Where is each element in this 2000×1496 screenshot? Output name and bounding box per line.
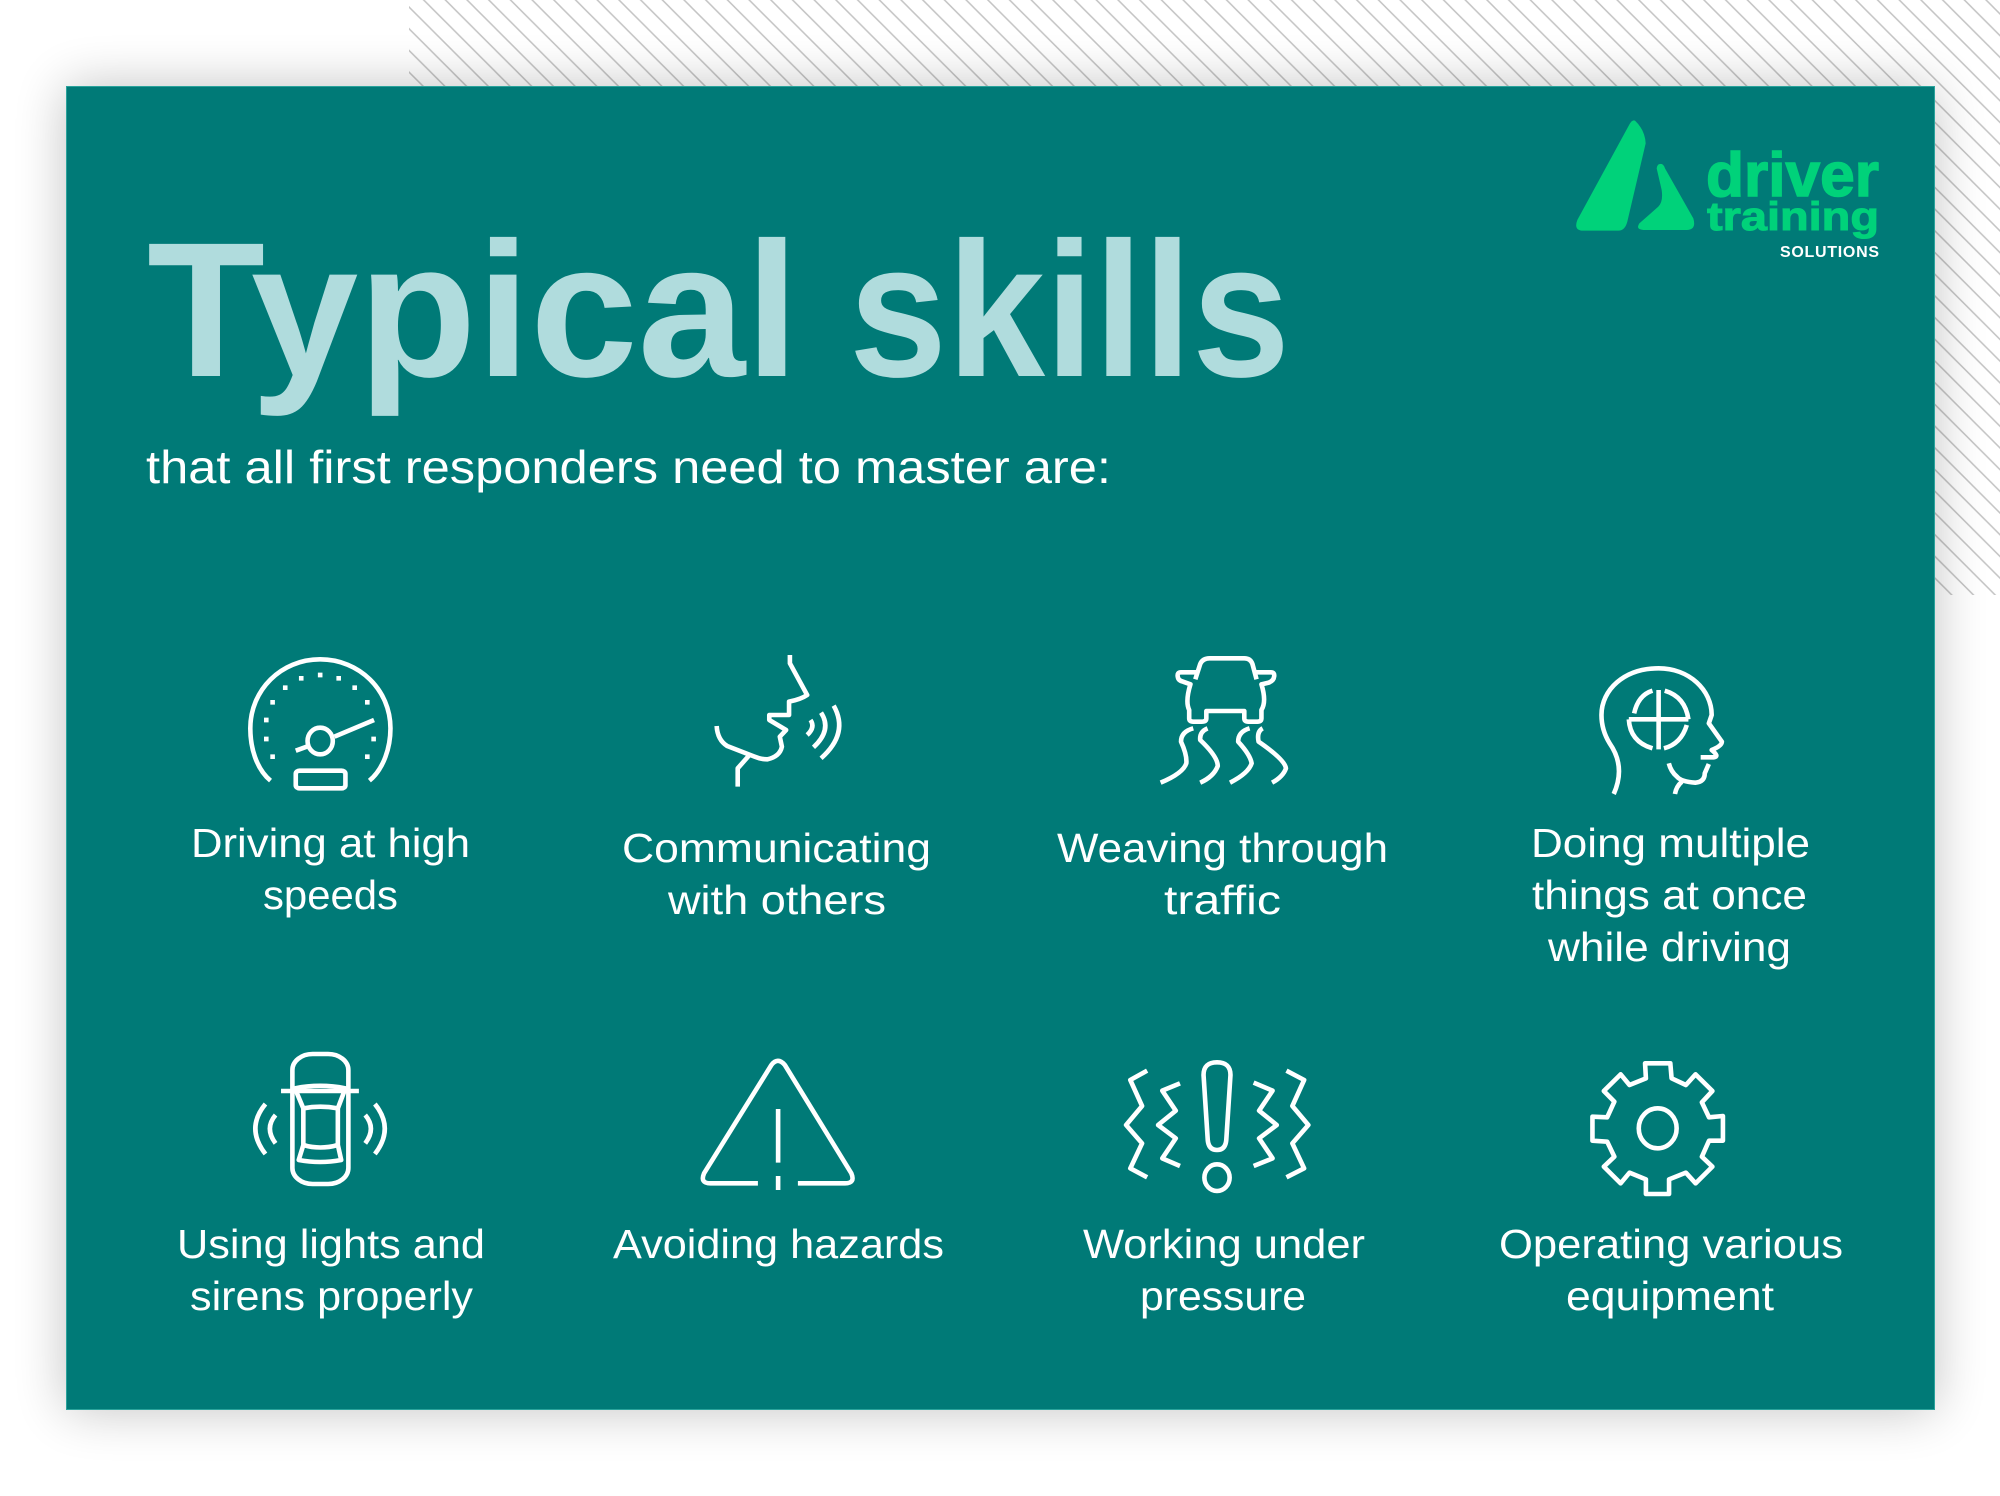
logo wordmark: solutions: SOLUTIONS [1780, 244, 1879, 261]
label: traffic [1164, 877, 1281, 923]
label: Using lights and [177, 1221, 485, 1267]
icon: exclamation with zigzags [1126, 1062, 1308, 1191]
label: Working under [1083, 1221, 1365, 1267]
label [1083, 1221, 1365, 1319]
icon: gear [1592, 1063, 1723, 1194]
label: Communicating [622, 825, 931, 871]
title: skills [849, 202, 1290, 417]
skill: weaving through traffic [1057, 658, 1388, 923]
icon: car top view with sirens [255, 1054, 385, 1184]
logo wordmark: driver: driver [1706, 141, 1879, 210]
label [191, 820, 470, 918]
label [1531, 820, 1810, 970]
label [1057, 825, 1388, 923]
skill: lights and sirens [177, 1054, 485, 1319]
label: Doing multiple [1531, 820, 1810, 866]
skill: driving at high speeds [191, 659, 470, 918]
label: Avoiding hazards [613, 1221, 944, 1267]
icon: car with skid marks [1161, 658, 1286, 783]
label [622, 825, 931, 923]
label: sirens properly [190, 1273, 474, 1319]
label: things at once [1532, 872, 1807, 918]
skill: operating equipment [1499, 1063, 1843, 1319]
icon: warning triangle [703, 1061, 853, 1190]
skill: communicating with others [622, 655, 931, 923]
skill: avoiding hazards [613, 1061, 944, 1267]
label: equipment [1566, 1273, 1775, 1319]
title: Typical [147, 202, 799, 417]
label: Operating various [1499, 1221, 1843, 1267]
label [1499, 1221, 1843, 1319]
skill: working under pressure [1083, 1062, 1365, 1319]
label [177, 1221, 485, 1319]
icon: head with steering wheel [1601, 668, 1722, 794]
label: with others [667, 877, 886, 923]
icon: logo sails [1576, 120, 1694, 231]
label: Weaving through [1057, 825, 1388, 871]
skill: doing multiple things [1531, 668, 1810, 970]
logo wordmark: training: training [1707, 195, 1879, 239]
title [147, 202, 1290, 417]
subtitle: that all first responders need to master are: [146, 441, 1111, 493]
logo: driver training solutions [1576, 120, 1879, 261]
icon: speaking face [717, 655, 839, 787]
icon: speedometer [250, 659, 390, 788]
label: speeds [263, 872, 398, 918]
label: Driving at high [191, 820, 470, 866]
label: pressure [1140, 1273, 1306, 1319]
label: while driving [1547, 924, 1791, 970]
